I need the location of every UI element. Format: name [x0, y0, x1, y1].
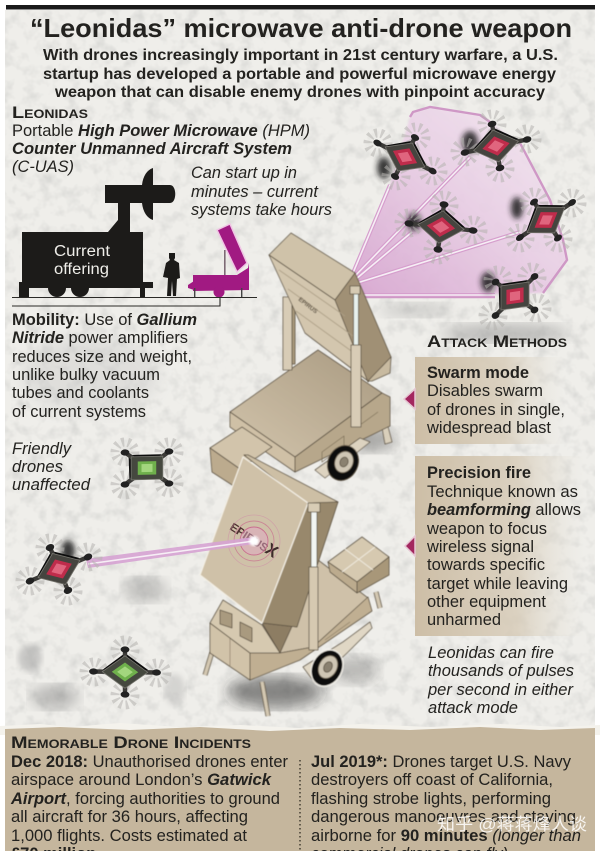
column: July 2019: destroyers off coast of California, — [311, 771, 553, 789]
panel: swarm mode — [404, 357, 565, 444]
panel: memorable drone incidents — [0, 723, 600, 851]
text block: mobility — [12, 311, 197, 421]
title: “Leonidas” microwave anti-drone weapon — [30, 13, 572, 43]
column: December 2018: Airport, forcing authorities to ground — [10, 790, 280, 808]
column: December 2018: Dec 2018: Unauthorised drones enter — [11, 753, 288, 771]
column: July 2019 — [311, 753, 581, 851]
front radar panel — [200, 455, 338, 627]
panel: precision fire: towards specific — [427, 556, 545, 574]
panel: swarm mode: Swarm mode — [427, 364, 529, 382]
drone smoke plumes — [61, 131, 523, 562]
panel: swarm mode: of drones in single, — [427, 401, 565, 419]
arrow: swarm pointer — [404, 389, 415, 409]
drone 3 — [399, 195, 483, 260]
text block: friendly drones: Friendly — [12, 440, 73, 458]
note: pulses: per second in either — [427, 681, 574, 699]
subtitle: startup has developed a portable and powerful microwave energy — [43, 66, 556, 83]
text block: Leonidas description: Leonidas — [12, 103, 88, 122]
Epirus logo on panel — [227, 521, 282, 562]
text block: mobility: Nitride power amplifiers — [12, 329, 188, 347]
rear deck — [230, 350, 390, 472]
launcher: precision fire (front) — [200, 455, 389, 716]
column: July 2019: airborne for 90 minutes (longer than — [311, 827, 581, 845]
panel: precision fire: unharmed — [427, 611, 501, 629]
column divider — [299, 760, 301, 851]
top rule — [6, 5, 595, 10]
column: December 2018: 1,000 flights. Costs estimated at — [11, 827, 247, 845]
rear raised pole — [350, 286, 361, 427]
front mechanism — [210, 600, 280, 653]
front legs — [205, 592, 380, 716]
drone 1 — [362, 119, 448, 195]
note: pulses: Leonidas can fire — [428, 644, 554, 662]
note: pulses: thousands of pulses — [428, 662, 574, 680]
callout: start-up time — [191, 164, 332, 219]
column: July 2019: flashing strobe lights, performing — [311, 790, 551, 808]
precision beam and impact ripple — [86, 515, 280, 568]
drone 4 — [503, 180, 589, 260]
drone swarm: disabled drones — [362, 114, 589, 334]
panel: precision fire — [405, 456, 585, 636]
callout: start-up time: minutes – current — [191, 183, 319, 201]
text block: mobility: unlike bulky vacuum — [12, 366, 160, 384]
scale ground lines — [12, 297, 257, 306]
subtitle — [43, 47, 558, 101]
text block: friendly drones: unaffected — [12, 476, 91, 494]
text block: Leonidas description: Portable High Power Microwave (HPM) — [12, 122, 310, 140]
panel: precision fire: Technique known as — [427, 483, 578, 501]
panel: precision fire: weapon to focus — [426, 520, 547, 538]
Epirus logo on panel: X — [262, 539, 282, 562]
panel: precision fire: beamforming allows — [427, 501, 581, 519]
panel: precision fire: target while leaving — [427, 575, 568, 593]
rear radar panel — [269, 233, 391, 382]
front storage box — [328, 537, 389, 593]
drone 2 — [455, 114, 537, 178]
rear support legs — [380, 415, 392, 444]
Epirus logo on panel: EPIRUS — [227, 521, 270, 555]
rear poles — [283, 297, 295, 370]
heading: incidents: Memorable Drone Incidents — [11, 733, 251, 752]
front wheel — [303, 622, 372, 692]
heading: attack methods: Attack Methods — [427, 332, 567, 351]
panel: swarm mode: widespread blast — [426, 419, 551, 437]
swarm microwave blast — [353, 107, 567, 297]
rear storage box — [210, 427, 272, 490]
text block: friendly drones — [12, 440, 91, 494]
silhouette: Leonidas launcher to scale — [188, 224, 249, 298]
panel: precision fire: other equipment — [427, 593, 546, 611]
column: July 2019: dangerous manoeuvres and staying — [311, 808, 576, 826]
disabled drone: precision target — [16, 531, 102, 607]
subtitle: With drones increasingly important in 21st century warfare, a U.S. — [43, 47, 558, 64]
column: December 2018 — [10, 753, 288, 851]
text block: mobility: of current systems — [12, 403, 146, 421]
silhouette: current offering radar truck: offering — [54, 261, 109, 278]
watermark: 知乎 @蒋蒋烽人谈 — [437, 815, 587, 834]
launcher: swarm mode (rear) — [210, 233, 396, 490]
text block: Leonidas description: (C-UAS) — [12, 158, 74, 176]
text block: mobility: Mobility: Use of Gallium — [12, 311, 197, 329]
drone 5 — [471, 258, 559, 334]
callout: start-up time: systems take hours — [191, 201, 332, 219]
panel: precision fire: wireless signal — [426, 538, 534, 556]
silhouette: current offering radar truck — [19, 168, 175, 297]
friendly drone: upper — [97, 432, 197, 504]
text block: Leonidas description — [12, 103, 310, 176]
rear wheel — [315, 438, 370, 486]
silhouette: soldier — [163, 253, 180, 296]
text block: friendly drones: drones — [12, 458, 63, 476]
rear label: EPIRUS — [297, 297, 318, 315]
text block: mobility: tubes and coolants — [12, 384, 149, 402]
friendly drone: lower — [84, 640, 167, 705]
column: December 2018: airspace around London’s Gatwick — [11, 771, 272, 789]
panel: precision fire: Precision fire — [427, 464, 531, 482]
column: December 2018: all aircraft for 36 hours, affecting — [11, 808, 248, 826]
note: pulses — [427, 644, 574, 717]
front deck — [210, 560, 372, 680]
arrow: precision pointer — [405, 536, 415, 556]
callout: start-up time: Can start up in — [191, 164, 297, 182]
text block: mobility: reduces size and weight, — [12, 348, 192, 366]
note: pulses: attack mode — [428, 699, 518, 717]
silhouette: current offering radar truck: Current — [54, 243, 111, 260]
subtitle: weapon that can disable enemy drones with pinpoint accuracy — [54, 84, 545, 101]
front raised pole — [308, 503, 320, 650]
column: July 2019: Jul 2019*: Drones target U.S. Navy — [311, 753, 572, 771]
text block: Leonidas description: Counter Unmanned Aircraft System — [12, 140, 292, 158]
panel: swarm mode: Disables swarm — [427, 382, 543, 400]
